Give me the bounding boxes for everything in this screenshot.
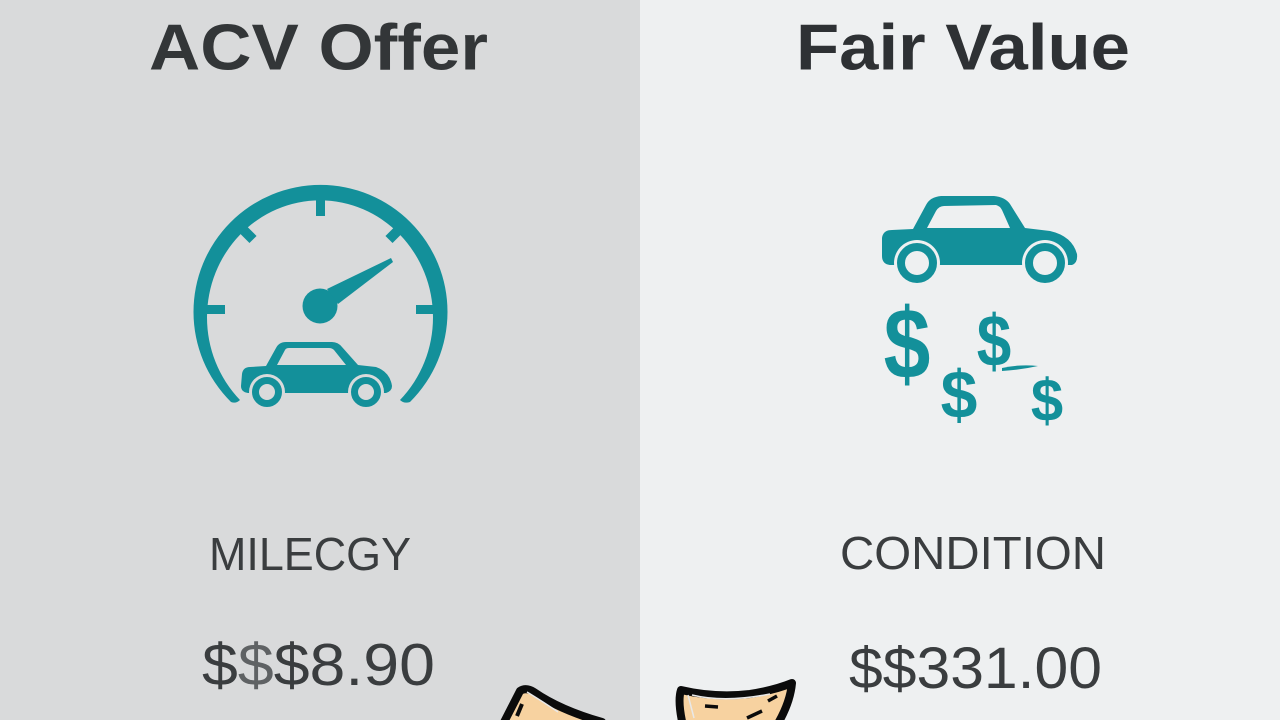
dollar signs [884, 287, 1063, 434]
panel: ACV offer [0, 0, 640, 720]
value: $$$8.90: $$$8.90 [202, 632, 435, 698]
icon: car with dollar signs [882, 196, 1077, 434]
dollar signs: $ [977, 301, 1011, 382]
panel: fair value [640, 0, 1280, 720]
dollar signs: $ [1031, 366, 1063, 434]
icon: speedometer with car [194, 185, 447, 410]
illustration: left money bag corner [500, 689, 602, 720]
dollar signs: $ [884, 287, 930, 400]
label: CONDITION: CONDITION [840, 527, 1106, 579]
label: MILECGY: MILECGY [209, 528, 411, 580]
heading: Fair Value: Fair Value [796, 10, 1130, 84]
dollar signs: $ [941, 358, 977, 433]
heading: ACV Offer: ACV Offer [149, 10, 488, 84]
illustration: right money bag corner [680, 683, 792, 720]
value: $$331.00: $$331.00 [849, 636, 1102, 701]
